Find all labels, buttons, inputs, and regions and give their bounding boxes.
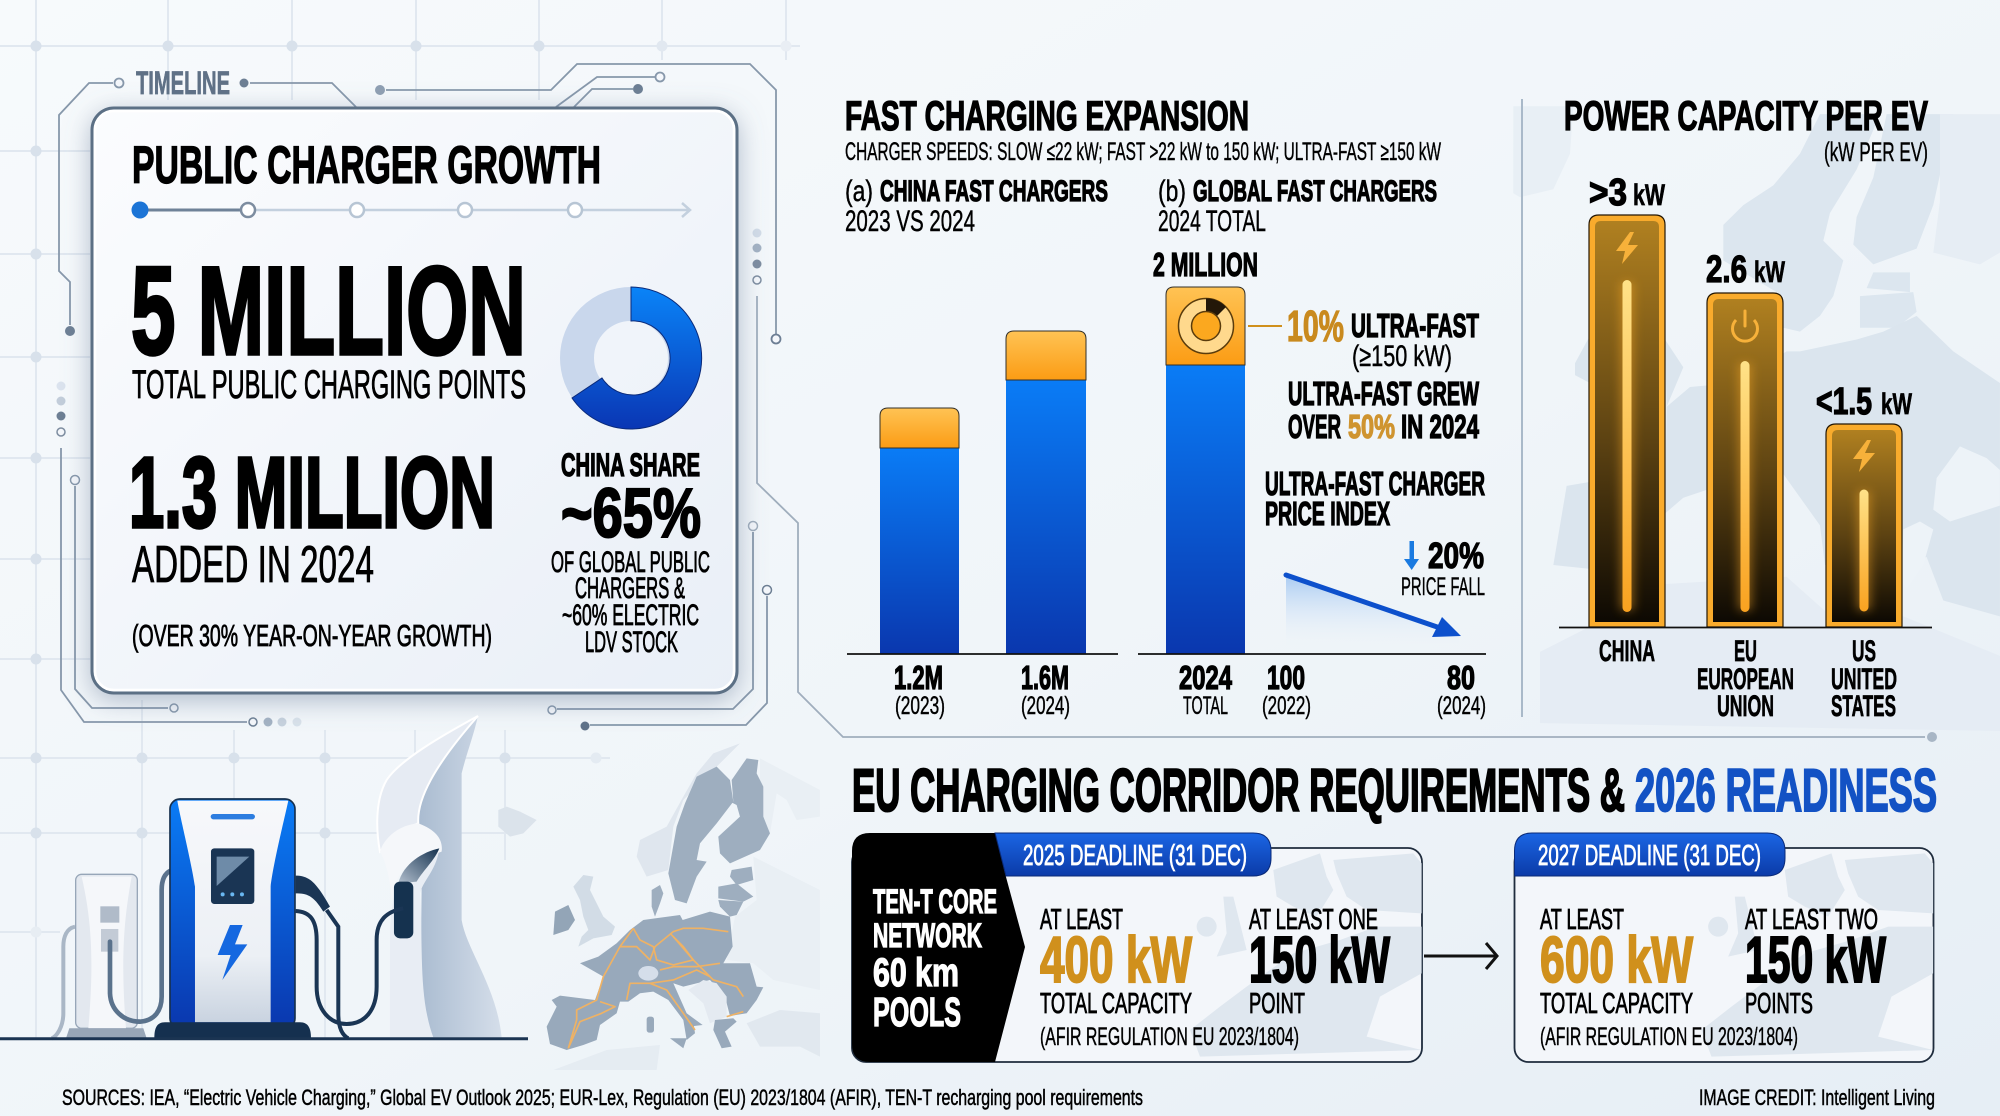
requirement: 150 kW point: 150 kW — [1249, 923, 1390, 996]
requirement: 400 kW total capacity: AT LEAST — [1040, 904, 1123, 936]
bar: china: >3 — [1589, 172, 1627, 214]
icon: screen — [211, 848, 254, 904]
callout: ultra-fast share — [1248, 302, 1479, 373]
bar: united states: STATES — [1831, 690, 1896, 723]
deadline tab: 2025 — [995, 833, 1271, 876]
callout: ultra-fast share: ULTRA-FAST — [1351, 307, 1479, 344]
stat: 65 percent: ~65% — [561, 474, 701, 552]
text block: china share detail: OF GLOBAL PUBLIC — [551, 546, 710, 579]
icon: ultra-fast share donut — [1178, 298, 1234, 354]
stat label: total public charging points: TOTAL PUBLIC CHARGING POINTS — [132, 363, 526, 407]
requirement: 400 kW total capacity — [1040, 904, 1299, 1051]
text block: china share detail: LDV STOCK — [585, 626, 678, 659]
illustration: chargers — [52, 716, 502, 1038]
subtitle: kW per EV: (kW PER EV) — [1824, 137, 1928, 167]
callout: ultra-fast share: 10% — [1287, 302, 1344, 351]
chart: ultra-fast charger price index: (2024) — [1437, 692, 1486, 720]
bar: united states: <1.5 — [1816, 381, 1872, 423]
deadline tab: 2025: 2025 DEADLINE (31 DEC) — [1023, 840, 1247, 872]
chart: ultra-fast charger price index: 100 — [1267, 659, 1305, 696]
panel: public charger growth — [92, 108, 737, 693]
map: Europe with TEN-T corridors — [498, 743, 820, 1070]
requirement: 150 kW point — [1249, 904, 1390, 1020]
chart: ultra-fast charger price index: PRICE FALL — [1401, 573, 1485, 601]
text block: china share detail: ~60% ELECTRIC — [562, 599, 699, 632]
bar: european union: UNION — [1717, 690, 1774, 723]
bar: united states: US — [1852, 635, 1876, 668]
black TEN-T tag: 60 km — [873, 951, 959, 995]
bar: china: kW — [1633, 179, 1665, 212]
icon: bolt — [1616, 232, 1638, 264]
callout: ultra-fast growth: OVER — [1288, 408, 1341, 445]
chart: ultra-fast charger price index — [1262, 465, 1486, 720]
bar: united states — [1816, 381, 1912, 723]
requirement: 600 kW total capacity: AT LEAST — [1540, 904, 1624, 936]
requirement: 150 kW points — [1745, 904, 1886, 1020]
bar: united states: kW — [1881, 388, 1912, 421]
subheading: global fast chargers: (b) — [1158, 175, 1186, 208]
bar: european union: kW — [1754, 256, 1785, 289]
timeline progress track — [132, 202, 690, 218]
requirement: 150 kW point: AT LEAST ONE — [1249, 904, 1378, 936]
requirement: 600 kW total capacity: 600 kW — [1540, 923, 1693, 996]
icon: main charger — [154, 799, 311, 1038]
icon: small charger — [52, 871, 171, 1038]
subheading: global fast chargers — [1158, 175, 1437, 238]
requirement: 400 kW total capacity: 400 kW — [1040, 923, 1192, 996]
stat label: added in 2024: ADDED IN 2024 — [132, 536, 374, 594]
bar chart: china fast chargers: (2024) — [1021, 692, 1070, 720]
panel: 2025 deadline — [852, 833, 1422, 1062]
panel: fast charging expansion — [845, 92, 1486, 720]
deadline tab: 2027: 2027 DEADLINE (31 DEC) — [1538, 840, 1761, 872]
requirement: 400 kW total capacity: (AFIR REGULATION EU 2023/1804) — [1040, 1023, 1299, 1051]
bar chart: global fast chargers: 2024 — [1179, 659, 1232, 696]
black TEN-T tag: POOLS — [873, 989, 961, 1035]
bar: european union — [1697, 249, 1794, 723]
arrow: 2025 to 2027 — [1424, 943, 1497, 969]
requirement: 150 kW points: POINTS — [1745, 988, 1813, 1020]
icon: cables — [296, 876, 403, 1038]
bar: european union: EU — [1734, 635, 1757, 668]
bar: china: CHINA — [1599, 635, 1655, 668]
text block: china share detail: CHARGERS & — [575, 572, 685, 605]
requirement: 150 kW points: AT LEAST TWO — [1745, 904, 1878, 936]
subheading: china fast chargers: 2023 VS 2024 — [845, 205, 975, 238]
text block: china share detail — [551, 546, 710, 659]
subheading: global fast chargers: 2024 TOTAL — [1158, 205, 1266, 238]
requirement: 150 kW points: 150 kW — [1745, 923, 1886, 996]
bar chart: china fast chargers — [847, 331, 1118, 720]
subheading: china fast chargers: (a) — [845, 175, 873, 208]
callout: ultra-fast growth: ULTRA-FAST GREW — [1288, 375, 1480, 412]
icon: tall sculptural connector — [377, 716, 502, 1037]
requirement: 600 kW total capacity — [1540, 904, 1798, 1051]
label: china share: CHINA SHARE — [561, 447, 700, 483]
chart: ultra-fast charger price index: 20% — [1428, 535, 1484, 576]
subheading: china fast chargers — [845, 175, 1108, 238]
callout: ultra-fast growth: 50% — [1348, 408, 1395, 445]
black TEN-T tag: TEN-T CORE — [873, 883, 997, 921]
icon: bolt — [1853, 440, 1875, 472]
subheading: global fast chargers: GLOBAL FAST CHARGERS — [1193, 175, 1437, 208]
stat: 1.3 million: 1.3 MILLION — [129, 437, 495, 549]
black TEN-T tag — [852, 833, 1025, 1062]
subtitle: charger speeds: CHARGER SPEEDS: SLOW ≤22 kW; FAST >22 kW to 150 kW; ULTRA-FAST ≥150 kW — [845, 138, 1441, 166]
label: timeline: TIMELINE — [136, 65, 230, 101]
bar: china — [1589, 172, 1665, 668]
bar chart: global fast chargers: 2 MILLION — [1153, 246, 1258, 283]
panel: power capacity per EV — [1559, 92, 1932, 723]
requirement: 600 kW total capacity: TOTAL CAPACITY — [1540, 988, 1693, 1020]
footer: sources: SOURCES: IEA, “Electric Vehicle Charging,” Global EV Outlook 2025; EUR-Lex, Regulation (EU) 2023/1804 (AFIR), TEN-T recharging pool requirements — [62, 1085, 1143, 1110]
bar chart: global fast chargers: TOTAL — [1183, 692, 1228, 720]
icon: bolt — [218, 925, 247, 980]
bar: european union: EUROPEAN — [1697, 663, 1794, 696]
donut chart: China share — [572, 287, 702, 429]
callout: ultra-fast growth: IN 2024 — [1401, 408, 1479, 445]
bar chart: china fast chargers: 1.6M — [1021, 659, 1069, 696]
callout: ultra-fast growth — [1288, 375, 1480, 445]
background map: Europe large, upper right — [1513, 106, 2000, 731]
heading: public charger growth: PUBLIC CHARGER GROWTH — [132, 136, 601, 195]
bar chart: global fast chargers — [1138, 246, 1486, 720]
bar: united states: UNITED — [1831, 663, 1897, 696]
requirement: 150 kW point: POINT — [1249, 988, 1305, 1020]
panel: 2027 deadline — [1514, 833, 1934, 1062]
deadline tab: 2027 — [1514, 833, 1785, 876]
requirement: 600 kW total capacity: (AFIR REGULATION EU 2023/1804) — [1540, 1023, 1798, 1051]
bar: european union: 2.6 — [1706, 249, 1747, 291]
stat: 5 million: 5 MILLION — [131, 242, 526, 381]
chart: ultra-fast charger price index: 80 — [1447, 659, 1475, 696]
callout: ultra-fast share: (≥150 kW) — [1352, 340, 1452, 373]
icon: down arrow — [1404, 541, 1419, 570]
icon: power — [1732, 311, 1758, 341]
chart: ultra-fast charger price index: (2022) — [1262, 692, 1311, 720]
subheading: china fast chargers: CHINA FAST CHARGERS — [880, 175, 1108, 208]
requirement: 400 kW total capacity: TOTAL CAPACITY — [1040, 988, 1192, 1020]
bar chart: china fast chargers: 1.2M — [894, 659, 943, 696]
heading: fast charging expansion: FAST CHARGING EXPANSION — [845, 92, 1249, 139]
note: year-on-year growth: (OVER 30% YEAR-ON-YEAR GROWTH) — [132, 618, 492, 653]
bar chart: china fast chargers: (2023) — [895, 692, 945, 720]
chart: ultra-fast charger price index: ULTRA-FAST CHARGER — [1265, 465, 1485, 502]
black TEN-T tag: NETWORK — [873, 917, 982, 955]
chart: ultra-fast charger price index: PRICE INDEX — [1265, 495, 1390, 532]
